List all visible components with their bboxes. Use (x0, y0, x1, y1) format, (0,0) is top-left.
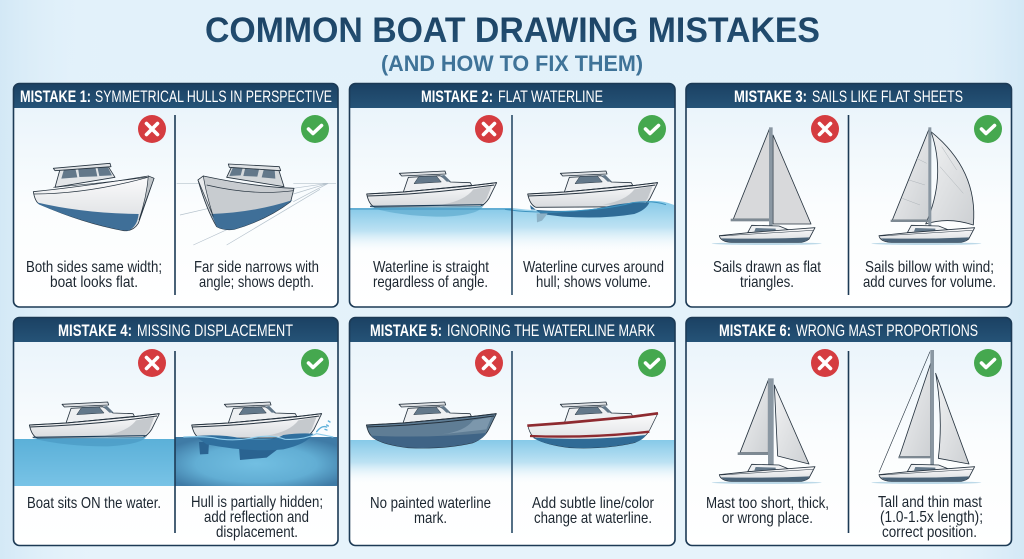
header: mistake 4: MISTAKE 4: (58, 321, 132, 340)
boat: curved waterline right (505, 171, 666, 222)
caption: wrong (373, 259, 489, 291)
boat: painted waterline right (527, 402, 658, 448)
icon: correct (974, 115, 1002, 143)
panel: mistake 1 (14, 84, 338, 307)
header: mistake 2: MISTAKE 2: (421, 87, 493, 106)
caption: wrong: Both sides same width; (26, 259, 162, 276)
water: right (175, 437, 337, 486)
sailboat: tall thin mast right (871, 350, 981, 484)
caption: correct: add reflection and (204, 509, 309, 526)
caption: wrong (706, 495, 829, 527)
water: left (350, 440, 512, 485)
water: left (14, 439, 175, 486)
caption: correct (863, 259, 996, 291)
caption: correct: hull; shows volume. (536, 274, 651, 291)
caption: correct (191, 494, 323, 541)
caption: wrong: No painted waterline (370, 495, 491, 512)
icon: correct (301, 349, 329, 377)
caption: wrong: or wrong place. (722, 510, 813, 527)
icon: wrong (475, 349, 503, 377)
boat: sits on water wrong (29, 402, 159, 446)
caption: correct: Add subtle line/color (532, 495, 655, 512)
caption: wrong (370, 495, 491, 527)
header: mistake 1: MISTAKE 1: (20, 87, 91, 106)
icon: wrong (811, 115, 839, 143)
caption: correct: Tall and thin mast (878, 494, 982, 511)
header: mistake 6: MISTAKE 6: (719, 321, 791, 340)
caption: correct: change at waterline. (534, 510, 652, 527)
icon: wrong (138, 115, 166, 143)
header: mistake 6 (686, 318, 1012, 342)
caption: wrong (713, 259, 821, 291)
icon: correct (301, 115, 329, 143)
sailboat: billowed sails right (871, 127, 981, 245)
caption: wrong: mark. (414, 510, 447, 527)
caption: wrong: Sails drawn as flat (713, 259, 821, 276)
header: mistake 3: MISTAKE 3: (734, 87, 807, 106)
caption: correct: Waterline curves around (523, 259, 664, 276)
water: right (512, 440, 674, 485)
boat: no waterline mark wrong (366, 402, 496, 448)
panel: mistake 4 (14, 318, 338, 546)
icon: wrong (475, 115, 503, 143)
header: mistake 2: FLAT WATERLINE (498, 87, 603, 106)
caption: correct: angle; shows depth. (199, 274, 314, 291)
caption: wrong: triangles. (740, 274, 794, 291)
sailboat: flat sails wrong (712, 127, 822, 245)
caption: correct (878, 494, 983, 541)
panel: mistake 2 (350, 84, 675, 307)
caption: correct: Sails billow with wind; (865, 259, 994, 276)
header: mistake 5: MISTAKE 5: (370, 321, 442, 340)
header: mistake 2 (350, 84, 675, 108)
boat: symmetrical hull wrong (33, 163, 154, 231)
boat: flat waterline wrong (350, 171, 512, 217)
header: mistake 3: SAILS LIKE FLAT SHEETS (812, 87, 963, 106)
caption: wrong: Boat sits ON the water. (27, 495, 161, 512)
boat: perspective hull right (177, 164, 336, 245)
water: right (512, 201, 674, 254)
panel: mistake 5 (350, 318, 675, 546)
caption: correct: add curves for volume. (863, 274, 996, 291)
caption: correct: (1.0-1.5x length); (880, 509, 983, 526)
caption: correct: correct position. (882, 524, 977, 541)
caption: correct (523, 259, 664, 291)
caption: correct: Hull is partially hidden; (191, 494, 323, 511)
subtitle: (AND HOW TO FIX THEM) (381, 51, 643, 76)
caption: wrong: Mast too short, thick, (706, 495, 829, 512)
title: COMMON BOAT DRAWING MISTAKES (205, 11, 820, 50)
boat: displaced hull right (183, 402, 333, 460)
header: mistake 4 (14, 318, 338, 342)
caption: correct: Far side narrows with (194, 259, 319, 276)
caption: wrong: regardless of angle. (373, 274, 488, 291)
header: mistake 5 (350, 318, 675, 342)
water: left (350, 208, 512, 254)
sailboat: short thick mast wrong (712, 378, 822, 484)
caption: wrong: boat looks flat. (50, 274, 138, 291)
caption: correct (194, 259, 319, 291)
icon: wrong (811, 349, 839, 377)
header: mistake 4: MISSING DISPLACEMENT (137, 321, 293, 340)
caption: correct: displacement. (216, 524, 298, 541)
header: mistake 1: SYMMETRICAL HULLS IN PERSPECTIVE (95, 87, 332, 106)
header: mistake 3 (686, 84, 1012, 108)
caption: correct (532, 495, 655, 527)
panel: mistake 6 (686, 318, 1012, 546)
icon: correct (974, 349, 1002, 377)
icon: wrong (138, 349, 166, 377)
icon: correct (638, 349, 666, 377)
icon: correct (638, 115, 666, 143)
header: mistake 5: IGNORING THE WATERLINE MARK (447, 321, 655, 340)
caption: wrong: Waterline is straight (373, 259, 489, 276)
caption: wrong (26, 259, 162, 291)
header: mistake 1 (14, 84, 338, 108)
panel: mistake 3 (686, 84, 1012, 307)
